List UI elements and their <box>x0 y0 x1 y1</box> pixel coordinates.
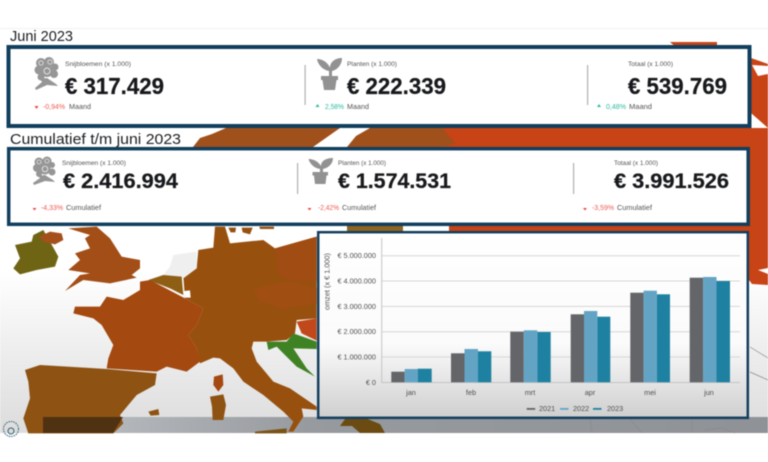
delta: Totaal: Cumulatief <box>617 203 652 212</box>
y axis labels: € 5.000.000 <box>337 251 376 260</box>
label: Totaal: Totaal (x 1.000) <box>614 160 658 167</box>
delta: Planten <box>308 203 376 212</box>
map: mainland europe <box>13 227 317 433</box>
delta: Snijbloemen <box>32 203 101 212</box>
map: eastern region <box>420 42 768 285</box>
Sardinia <box>210 394 226 420</box>
bars: feb <box>451 349 491 382</box>
Spain and Portugal <box>23 365 157 433</box>
icon: bouquet <box>34 57 58 90</box>
delta: Totaal <box>597 102 652 111</box>
bars: mrt <box>510 330 551 382</box>
map: white bay <box>752 65 768 76</box>
x axis labels: jan <box>405 388 416 397</box>
Czech tone <box>253 282 317 308</box>
value: Totaal: € 539.769 <box>628 73 727 99</box>
map: eastern border lines <box>590 347 768 433</box>
x axis labels: mrt <box>525 388 535 397</box>
map: dark bottom band <box>113 417 768 433</box>
y axis labels: € 4.000.000 <box>337 276 376 286</box>
label: Planten: Planten (x 1.000) <box>347 61 397 68</box>
map: Greece fragment <box>340 418 385 433</box>
Belgium <box>148 275 183 295</box>
icon: plant <box>308 158 333 184</box>
bars: mei <box>630 291 670 382</box>
Balearic islands <box>148 409 159 416</box>
x axis labels: apr <box>585 388 596 397</box>
value: Snijbloemen: € 2.416.994 <box>63 170 178 193</box>
y axis labels: € 2.000.000 <box>337 327 376 336</box>
logo: mandala <box>4 422 18 436</box>
United Kingdom <box>65 227 140 291</box>
delta: Planten: Cumulatief <box>342 203 376 212</box>
bars: jun <box>690 277 730 382</box>
bars: apr <box>571 311 610 382</box>
delta: Snijbloemen: -4,33% <box>41 203 64 212</box>
legend <box>527 404 623 413</box>
label: Snijbloemen: Snijbloemen (x 1.000) <box>62 160 126 167</box>
delta: Planten: Maand <box>347 102 369 111</box>
delta: Planten <box>316 102 369 111</box>
delta: Totaal: 0,48% <box>606 102 627 111</box>
panel: cumulatief <box>9 149 748 224</box>
x axis labels <box>405 388 714 397</box>
y axis labels: € 3.000.000 <box>337 302 376 311</box>
Northern Ireland <box>39 232 63 244</box>
label: Snijbloemen: Snijbloemen (x 1.000) <box>65 61 131 68</box>
icon: plant <box>317 58 342 90</box>
y axis labels: € 1.000.000 <box>337 352 376 362</box>
heading: Cumulatief: Cumulatief t/m juni 2023 <box>10 131 181 148</box>
map: northern strip <box>193 128 455 147</box>
heading: Juni 2023: Juni 2023 <box>10 28 73 45</box>
y axis labels: € 0 <box>366 378 376 387</box>
map: Spain shaded <box>43 417 123 433</box>
delta: Planten: -2,42% <box>318 203 340 212</box>
delta: Totaal <box>583 203 652 212</box>
icon: bouquet <box>33 156 56 185</box>
delta: Snijbloemen <box>34 102 91 111</box>
x axis labels: feb <box>466 388 476 397</box>
value: Totaal: € 3.991.526 <box>614 170 729 193</box>
Poland tone <box>275 237 317 282</box>
Corsica <box>213 374 223 392</box>
Danish islands <box>228 227 274 234</box>
panel: juni 2023 <box>8 47 750 126</box>
x axis labels: mei <box>644 388 656 397</box>
Ireland <box>13 230 58 274</box>
France <box>73 280 203 372</box>
Luxembourg <box>184 290 191 298</box>
value: Snijbloemen: € 317.429 <box>65 73 164 99</box>
panel: bar chart <box>318 232 748 418</box>
Netherlands <box>163 252 197 278</box>
axis title: omzet (x € 1.000) <box>322 253 332 310</box>
value: Planten: € 222.339 <box>347 73 446 99</box>
map: strip below panels <box>347 224 403 232</box>
legend: 2023 <box>607 404 623 413</box>
legend: 2021 <box>539 404 555 413</box>
delta: Totaal: -3,59% <box>592 203 615 212</box>
delta: Totaal: Maand <box>629 102 652 111</box>
label: Totaal: Totaal (x 1.000) <box>628 61 673 68</box>
Sicily <box>255 428 287 433</box>
y axis labels <box>337 251 376 387</box>
delta: Snijbloemen: Maand <box>69 102 91 111</box>
delta: Planten: 2,58% <box>325 102 345 111</box>
value: Planten: € 1.574.531 <box>338 170 451 193</box>
x axis labels: jun <box>703 388 714 397</box>
delta: Snijbloemen: -0,94% <box>43 102 66 111</box>
legend: 2022 <box>573 404 589 413</box>
Hungary <box>297 318 317 341</box>
label: Planten: Planten (x 1.000) <box>338 160 386 167</box>
Croatia <box>267 333 317 377</box>
Central Europe and Italy <box>183 227 317 432</box>
bars: jan <box>391 369 432 382</box>
delta: Snijbloemen: Cumulatief <box>66 203 101 212</box>
